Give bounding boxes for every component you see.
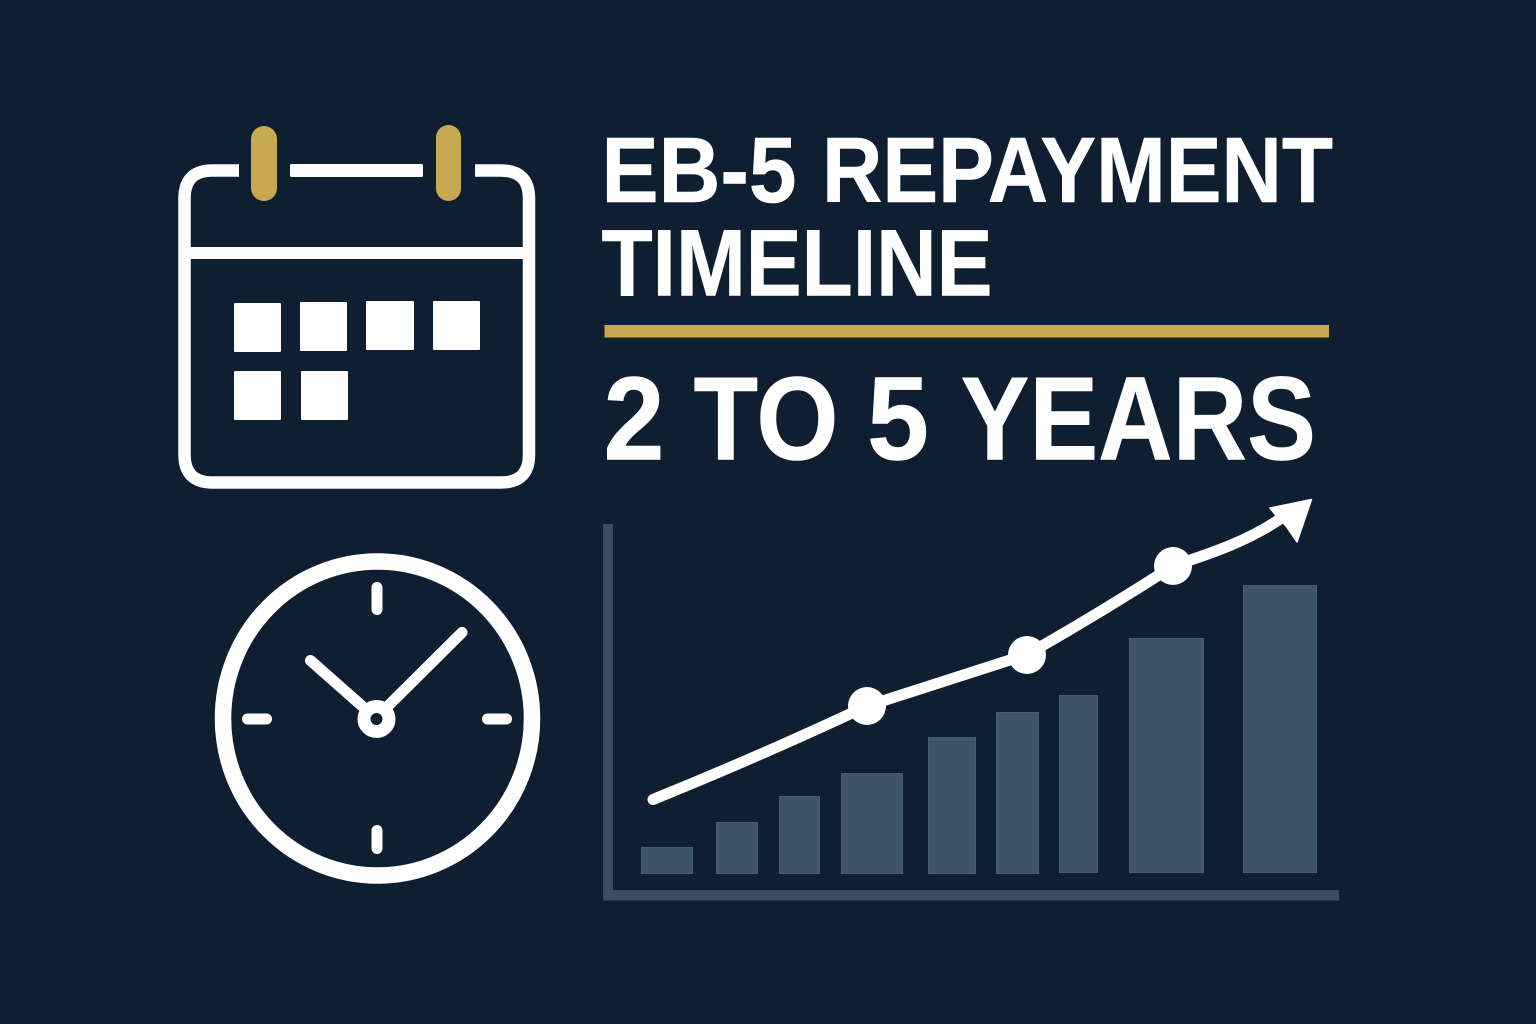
arrow head [1270, 500, 1312, 542]
trend line [653, 517, 1283, 800]
title line one: EB-5 [602, 118, 796, 222]
data points [848, 547, 1192, 725]
title line two: TIMELINE [602, 210, 992, 316]
chart bars [642, 586, 1316, 874]
chart axes [603, 524, 1339, 900]
title line one [602, 118, 1333, 222]
headline duration [604, 352, 1316, 486]
headline duration: 5 [867, 352, 929, 486]
icon: calendar [184, 125, 529, 482]
gold divider [604, 325, 1329, 338]
title line one: REPAYMENT [822, 118, 1333, 222]
icon: clock [223, 562, 532, 876]
headline duration: YEARS [960, 352, 1316, 486]
headline duration: 2 [604, 352, 664, 486]
bar chart with trend line [603, 500, 1339, 900]
headline duration: TO [694, 352, 838, 486]
